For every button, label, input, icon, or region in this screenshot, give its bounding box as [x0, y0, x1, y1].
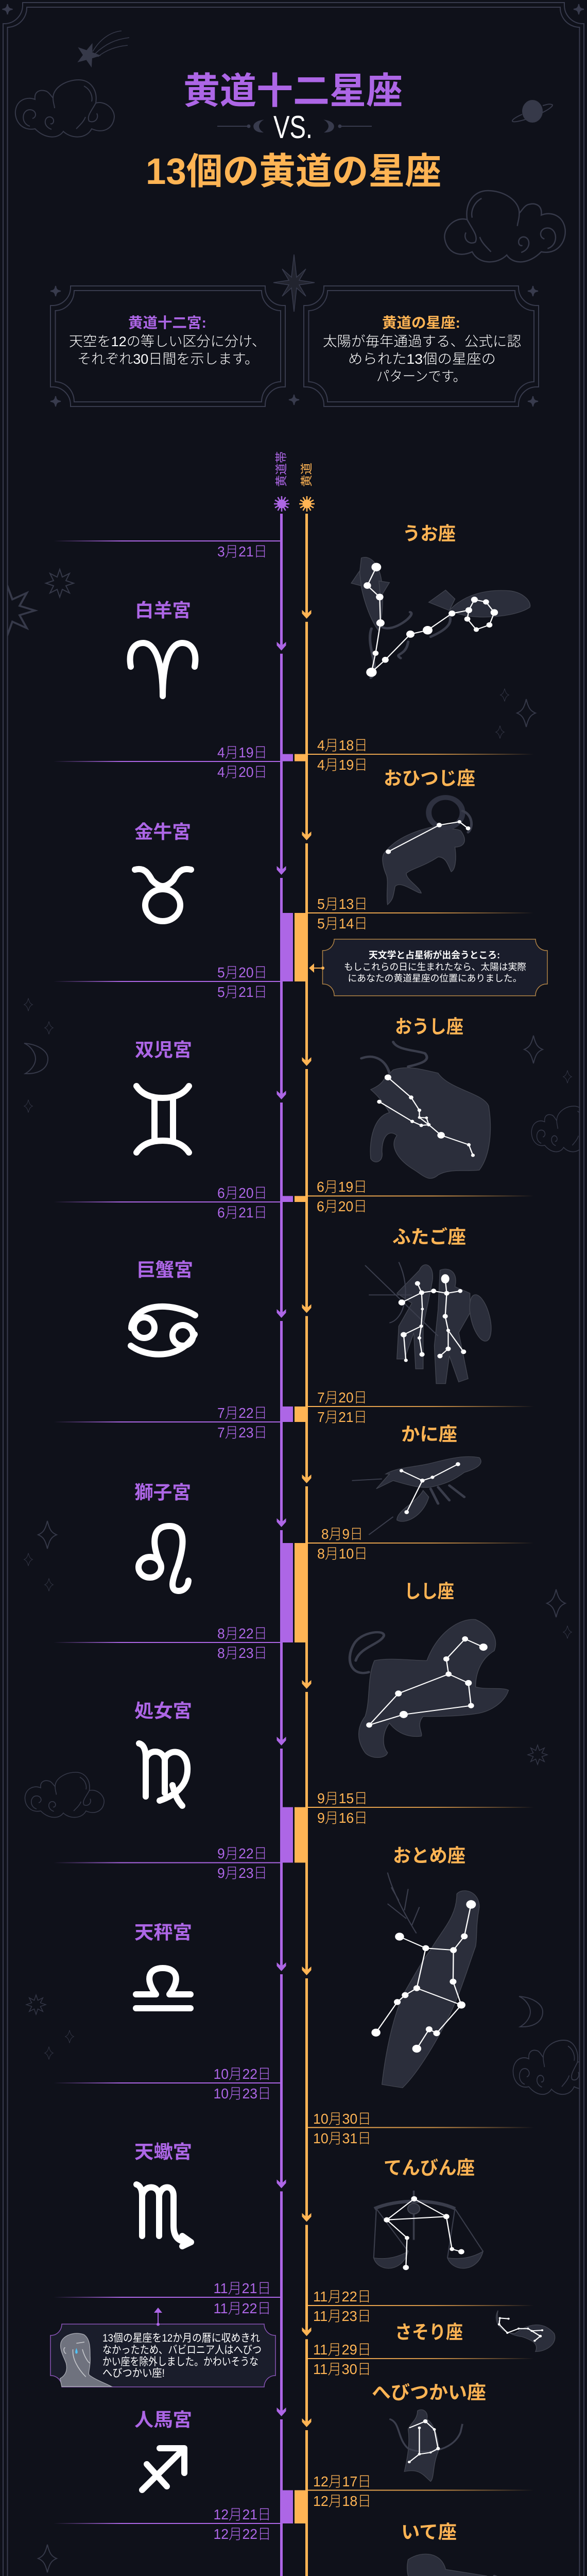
zodiac: Taurus: 金牛宮: [134, 821, 191, 842]
constellation: Ophiuchus: へびつかい座: [372, 2382, 486, 2403]
constellation: Sagittarius: いて座: [401, 2521, 457, 2543]
panel: ecliptic constellation definition: パターンです。: [376, 369, 466, 384]
purple date boundaries and labels: 9月22日: [217, 1845, 267, 1861]
orange date boundaries and labels: 8月9日: [321, 1526, 363, 1542]
orange date boundaries and labels: 7月20日: [317, 1389, 367, 1405]
orange date boundaries and labels: 11月30日: [313, 2361, 371, 2377]
callout: Ophiuchus excluded: へびつかい座!: [102, 2367, 165, 2379]
title: 黄道十二星座: [183, 71, 403, 112]
title: 13個の黄道の星座: [146, 151, 441, 192]
purple date boundaries and labels: 8月22日: [217, 1625, 267, 1641]
purple date boundaries and labels: 11月21日: [213, 2280, 271, 2296]
orange date boundaries and labels: 12月18日: [313, 2493, 371, 2509]
callout: Ophiuchus excluded: なかったため、バビロニア人はへびつ: [102, 2344, 262, 2356]
constellation: Ophiuchus: [372, 2382, 486, 2481]
zodiac: Gemini: 双児宮: [135, 1039, 192, 1060]
constellation: Cancer: かに座: [401, 1423, 457, 1445]
constellation: Taurus: [361, 1016, 490, 1178]
axis label: zodiac band: 黄道帯: [274, 451, 288, 487]
zodiac: Leo: 獅子宮: [134, 1482, 191, 1503]
purple date boundaries and labels: [54, 540, 280, 2576]
callout: Ophiuchus excluded: [50, 2308, 275, 2387]
zodiac: Aries: [130, 600, 195, 696]
purple date boundaries and labels: 3月21日: [217, 544, 267, 560]
purple date boundaries and labels: 12月22日: [213, 2526, 271, 2542]
orange date boundaries and labels: 11月29日: [313, 2342, 371, 2358]
purple date boundaries and labels: 4月19日: [217, 744, 267, 760]
panel: ecliptic constellation definition: 黄道の星座:: [382, 315, 460, 331]
purple timeline axis with arrows: [277, 514, 286, 2576]
orange date boundaries and labels: 7月21日: [317, 1409, 367, 1425]
callout: Ophiuchus excluded: 13個の星座を12か月の暦に収めきれ: [102, 2332, 260, 2344]
overlap blocks: [280, 754, 307, 2576]
purple date boundaries and labels: 4月20日: [217, 764, 267, 780]
zodiac: Libra: [134, 1922, 192, 2008]
constellation: Scorpius: さそり座: [395, 2321, 463, 2343]
zodiac: Scorpio: 天蠍宮: [134, 2141, 192, 2162]
zodiac: Sagittarius: [134, 2409, 192, 2490]
panel: zodiac definition: [50, 286, 285, 406]
callout: Ophiuchus excluded: かい座を除外しました。かわいそうな: [102, 2356, 258, 2368]
constellation: Leo: しし座: [404, 1581, 454, 1602]
zodiac: Scorpio: [134, 2141, 192, 2246]
zodiac: Virgo: 処女宮: [134, 1700, 192, 1721]
purple date boundaries and labels: 5月20日: [217, 964, 267, 980]
panel: ecliptic constellation definition: [289, 286, 539, 406]
constellation: Pisces: [351, 523, 530, 678]
purple date boundaries and labels: 7月23日: [217, 1425, 267, 1440]
icon: crying Ophiuchus: [60, 2333, 112, 2386]
purple date boundaries and labels: 6月20日: [217, 1185, 267, 1201]
big star ornament: [273, 255, 315, 312]
purple date boundaries and labels: 11月22日: [213, 2300, 271, 2316]
orange date boundaries and labels: 9月16日: [317, 1810, 368, 1826]
purple date boundaries and labels: 10月23日: [213, 2086, 271, 2102]
title: [146, 71, 441, 192]
constellation: Aries: [383, 768, 475, 905]
callout: astronomy meets astrology: 天文学と占星術が出会うところ:: [369, 950, 500, 960]
constellation: Gemini: ふたご座: [392, 1226, 466, 1247]
orange date boundaries and labels: 8月10日: [317, 1546, 368, 1562]
zodiac: Aries: 白羊宮: [135, 600, 191, 621]
purple date boundaries and labels: 7月22日: [217, 1405, 267, 1421]
panel: ecliptic constellation definition: められた13個の星座の: [348, 351, 496, 367]
constellation: Sagittarius: [337, 2521, 513, 2576]
zodiac: Libra: 天秤宮: [134, 1922, 192, 1943]
constellation: Scorpius: [395, 2311, 555, 2351]
purple date boundaries and labels: 8月23日: [217, 1645, 267, 1661]
constellation: Taurus: おうし座: [395, 1016, 463, 1037]
constellation: Virgo: [371, 1845, 479, 2088]
zodiac: Gemini: [135, 1039, 192, 1153]
orange date boundaries and labels: 11月22日: [313, 2289, 371, 2304]
purple date boundaries and labels: 12月21日: [213, 2506, 271, 2522]
constellation: Aries: おひつじ座: [384, 768, 475, 789]
zodiac: Cancer: [131, 1259, 195, 1354]
orange date boundaries and labels: 6月20日: [317, 1198, 367, 1214]
callout: astronomy meets astrology: にあなたの黄道星座の位置にありました。: [348, 973, 522, 984]
purple date boundaries and labels: 5月21日: [217, 984, 267, 1000]
orange date boundaries and labels: 12月17日: [313, 2473, 371, 2489]
orange date boundaries and labels: 10月31日: [313, 2130, 371, 2146]
purple date boundaries and labels: 9月23日: [217, 1865, 267, 1881]
constellation: Leo: [350, 1581, 509, 1757]
orange date boundaries and labels: 9月15日: [317, 1790, 368, 1806]
panel: zodiac definition: 黄道十二宮:: [128, 315, 206, 331]
orange date boundaries and labels: 4月19日: [317, 757, 368, 773]
arrow up to boundary: [154, 2308, 162, 2326]
orange date boundaries and labels: 11月23日: [313, 2308, 371, 2324]
zodiac: Sagittarius: 人馬宮: [134, 2409, 192, 2430]
constellation: Libra: てんびん座: [384, 2157, 475, 2178]
panel: ecliptic constellation definition: 太陽が毎年通過する、公式に認: [323, 334, 521, 349]
panel: zodiac definition: 天空を12の等しい区分に分け、: [69, 334, 266, 349]
divider with VS.: [217, 110, 372, 145]
axis label: ecliptic: 黄道: [300, 463, 313, 487]
callout: astronomy meets astrology: [309, 939, 547, 996]
constellation: Pisces: うお座: [403, 523, 456, 544]
icon: purple sun: [274, 496, 289, 512]
zodiac: Leo: [134, 1482, 191, 1591]
orange date boundaries and labels: [307, 737, 534, 2576]
purple date boundaries and labels: 10月22日: [213, 2066, 271, 2082]
constellation: Libra: [374, 2157, 483, 2270]
zodiac: Virgo: [134, 1700, 192, 1806]
arrow to overlap block: [309, 963, 324, 973]
icon: orange sun: [299, 496, 315, 512]
purple date boundaries and labels: 6月21日: [217, 1205, 267, 1221]
orange date boundaries and labels: 5月14日: [317, 916, 368, 931]
orange date boundaries and labels: 6月19日: [317, 1179, 367, 1195]
zodiac: Taurus: [134, 821, 191, 921]
callout: astronomy meets astrology: もしこれらの日に生まれたなら、太陽は実際: [344, 962, 526, 972]
divider with VS.: VS.: [273, 110, 313, 145]
constellation: Virgo: おとめ座: [393, 1845, 465, 1866]
orange timeline axis with arrows: [302, 514, 311, 2576]
zodiac: Cancer: 巨蟹宮: [136, 1259, 193, 1280]
constellation: Cancer: [352, 1423, 481, 1535]
panel: zodiac definition: それぞれ30日間を示します。: [77, 351, 258, 367]
orange date boundaries and labels: 4月18日: [317, 737, 368, 753]
constellation: Gemini: [365, 1226, 495, 1384]
orange date boundaries and labels: 5月13日: [317, 896, 368, 912]
orange date boundaries and labels: 10月30日: [313, 2111, 371, 2127]
